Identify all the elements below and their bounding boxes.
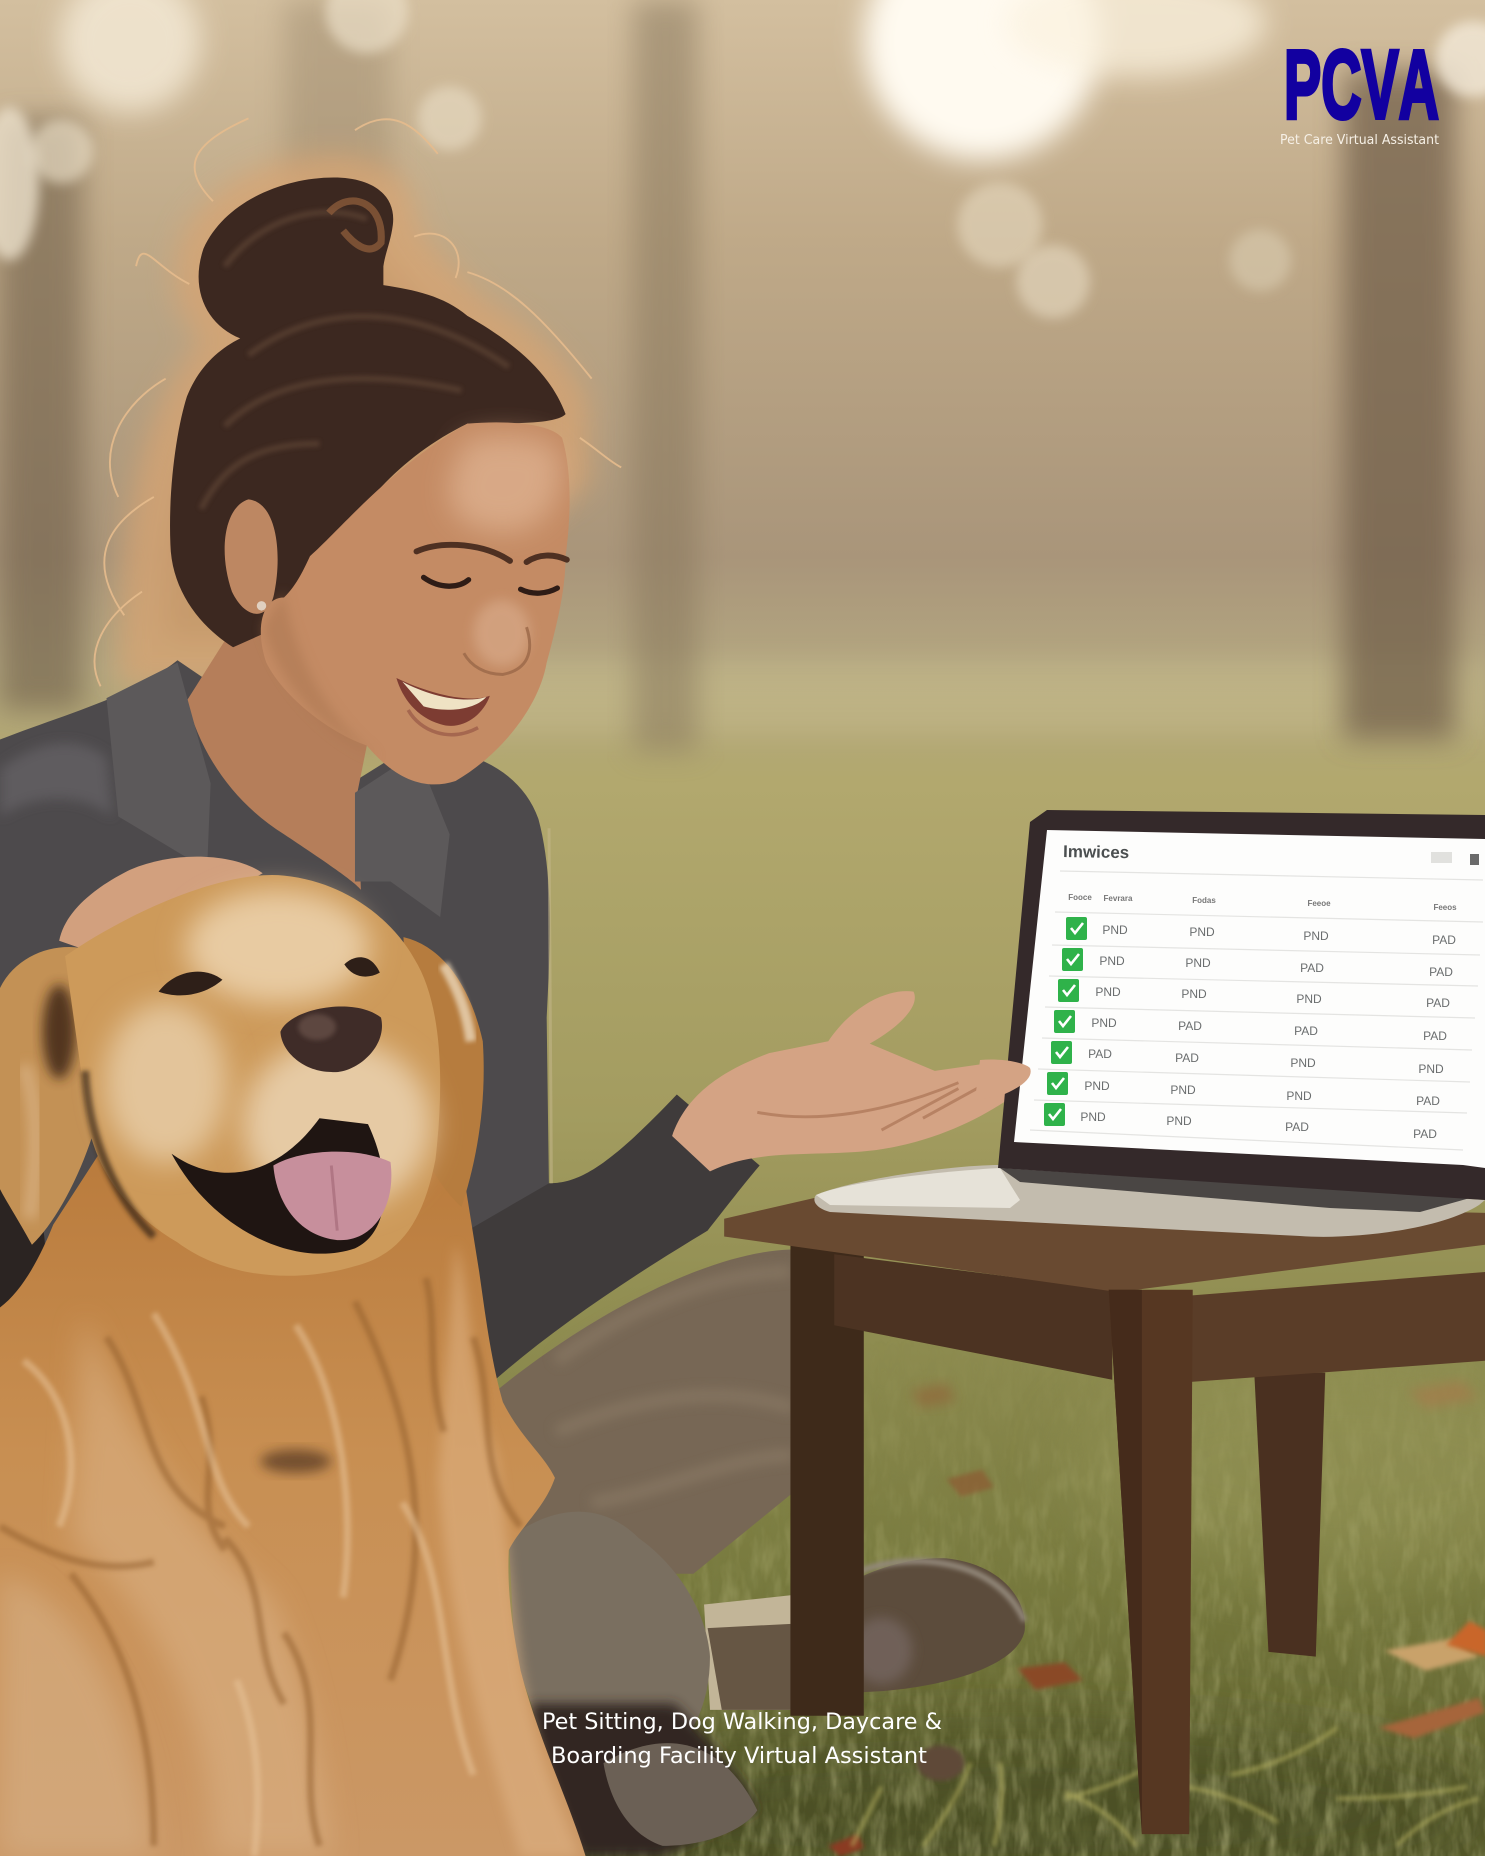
second shoe	[603, 1743, 757, 1846]
table header row: Fodas	[1192, 896, 1216, 905]
body fur	[0, 1124, 586, 1856]
woman	[0, 118, 1031, 1856]
table rows: PND	[1170, 1083, 1196, 1097]
table rows: PND	[1286, 1089, 1312, 1103]
laptop lid	[998, 810, 1485, 1200]
table rows: PND	[1080, 1110, 1106, 1124]
fingertips over laptop	[975, 1059, 1031, 1100]
table header row: Fooce	[1068, 893, 1092, 902]
table header row: Feeoe	[1307, 899, 1331, 908]
shoe	[704, 1558, 1025, 1710]
table rows: PAD	[1285, 1120, 1309, 1134]
table rows: PND	[1095, 985, 1121, 999]
hair halo	[142, 177, 566, 663]
table rows: PND	[1166, 1114, 1192, 1128]
green checkmarks	[1044, 917, 1087, 1126]
table rows: PND	[1290, 1056, 1316, 1070]
hair wisps	[95, 118, 621, 686]
table rows: PND	[1102, 923, 1128, 937]
table header row: Feeos	[1433, 903, 1457, 912]
mouth	[172, 1118, 384, 1254]
laptop screen	[1014, 830, 1485, 1168]
grass and fallen leaves	[605, 1382, 1485, 1856]
table rows	[1080, 923, 1456, 1141]
table side apron	[834, 1254, 1112, 1380]
logo wordmark: PCVA	[1284, 30, 1439, 139]
table rows: PND	[1296, 992, 1322, 1006]
logo tagline: Pet Care Virtual Assistant	[1280, 133, 1439, 148]
dog nose	[280, 1006, 382, 1072]
tongue	[273, 1152, 391, 1240]
table rows: PAD	[1429, 965, 1453, 979]
wooden table	[724, 1197, 1485, 1834]
nose	[473, 600, 530, 666]
table rows: PND	[1099, 954, 1125, 968]
table rows: PAD	[1178, 1019, 1202, 1033]
table rows: PAD	[1432, 933, 1456, 947]
table rows: PND	[1303, 929, 1329, 943]
legs: knee	[509, 1512, 710, 1775]
table front leg	[1109, 1290, 1193, 1834]
dog eyes	[159, 972, 222, 995]
collar shadow	[260, 1450, 331, 1473]
table rows: PND	[1189, 925, 1215, 939]
sleeve	[467, 1095, 760, 1384]
muzzle	[243, 1039, 432, 1209]
invoice table	[1030, 871, 1483, 1150]
screen heading: Imwices	[1063, 842, 1129, 862]
logo	[1280, 30, 1439, 148]
left ear	[0, 947, 95, 1245]
legs: thigh	[497, 1250, 795, 1574]
caption line one: Pet Sitting, Dog Walking, Daycare &	[542, 1710, 942, 1735]
head	[65, 875, 440, 1276]
hair	[170, 177, 566, 647]
screen menu icon	[1470, 854, 1479, 865]
eyes and brows	[417, 545, 567, 562]
shadow under leg	[527, 1704, 757, 1856]
caption	[542, 1710, 942, 1769]
table rows: PND	[1418, 1062, 1444, 1076]
table header row: Fevrara	[1104, 894, 1133, 903]
neck	[187, 592, 367, 890]
table rows: PAD	[1175, 1051, 1199, 1065]
golden retriever	[0, 875, 586, 1856]
table back leg	[1254, 1373, 1325, 1657]
table front apron	[1189, 1272, 1485, 1382]
table rows: PAD	[1088, 1047, 1112, 1061]
right ear	[403, 937, 484, 1207]
table rows: PAD	[1294, 1024, 1318, 1038]
screen button	[1431, 852, 1452, 863]
table rows: PND	[1181, 987, 1207, 1001]
table rows: PAD	[1300, 961, 1324, 975]
face	[261, 422, 570, 784]
table rows: PAD	[1416, 1094, 1440, 1108]
caption line two: Boarding Facility Virtual Assistant	[551, 1744, 927, 1769]
table rows: PND	[1185, 956, 1211, 970]
fur strands	[0, 1278, 521, 1846]
table top	[724, 1197, 1485, 1292]
cheek	[104, 1002, 227, 1163]
smile	[396, 678, 490, 735]
table rows: PND	[1084, 1079, 1110, 1093]
laptop base	[814, 1165, 1485, 1237]
sweater	[0, 660, 550, 1313]
pointing hand	[672, 991, 1031, 1171]
table header row	[1068, 893, 1457, 912]
table rows: PAD	[1413, 1127, 1437, 1141]
forehead	[186, 890, 370, 1003]
table rows: PAD	[1426, 996, 1450, 1010]
laptop	[814, 810, 1485, 1237]
collar	[106, 663, 450, 917]
sweater shadow	[0, 1187, 45, 1310]
table rows: PAD	[1423, 1029, 1447, 1043]
table left leg	[790, 1242, 864, 1716]
hand on dog	[59, 857, 263, 949]
ear	[225, 499, 278, 614]
table rows: PND	[1091, 1016, 1117, 1030]
